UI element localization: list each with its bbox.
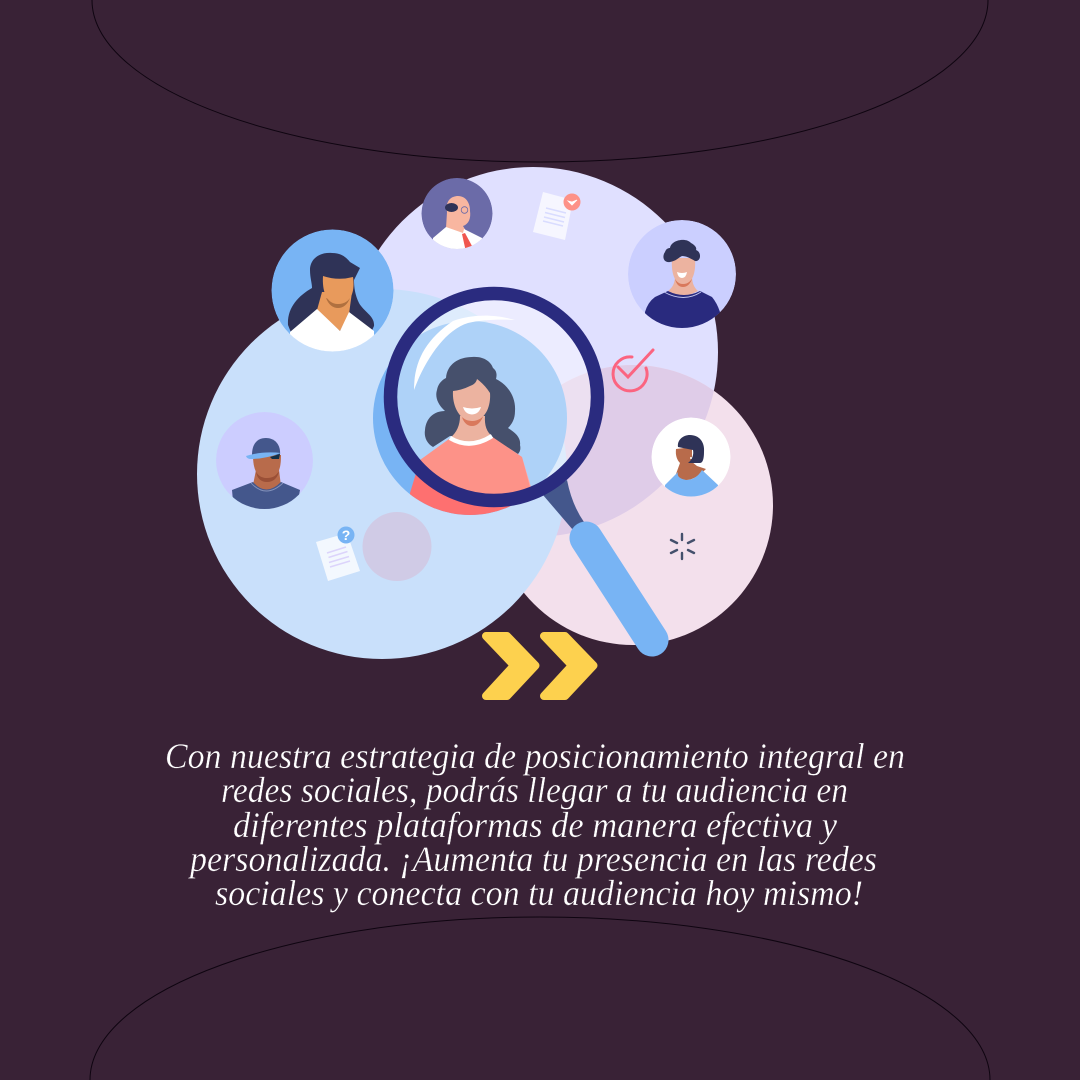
text block: main message: Con nuestra estrategia de posicionamiento integral en [165,736,905,776]
avatar: smiling man with curly hair [628,220,736,332]
hair [663,240,700,262]
magnifier glass [394,297,594,497]
glasses [461,207,468,213]
person in magnifier [414,316,530,494]
shirt [232,482,300,512]
avatar: woman with short dark hair [652,418,730,500]
shirt [433,227,482,249]
cap brim [246,452,281,459]
icon: document with check badge [533,192,580,240]
chin shadow [256,472,279,482]
collar [450,436,492,444]
hair [425,357,520,454]
smile [463,407,481,414]
neck [254,470,280,490]
text block: main message: personalizada. ¡Aumenta tu presencia en las redes [187,839,877,879]
top ellipse outline [92,0,988,162]
collar [664,292,701,298]
icon: yellow double chevron [486,636,594,696]
lens highlight [414,316,515,390]
chin shadow [326,298,350,308]
panel: lavender circle [348,167,718,537]
avatar: woman with long hair [272,230,394,356]
hair [288,253,374,335]
magnifier ring [390,294,598,500]
face [453,379,490,421]
panel: light blue circle [197,289,567,659]
collar [251,483,283,491]
chin shadow [462,416,484,426]
skin [676,447,706,480]
shirt [645,291,720,332]
cap shadow [270,454,280,459]
head [446,196,470,234]
panel: pink and lavender overlap [556,365,714,536]
tie [462,233,472,248]
icon: pink check circle [613,350,653,391]
panel: pink circle [493,365,773,645]
smile [677,272,687,278]
text block: main message: diferentes plataformas de manera efectiva y [233,805,837,845]
icon: document with question badge: ? [342,527,350,543]
neck [668,278,698,295]
text block: main message: redes sociales, podrás llegar a tu audiencia en [221,770,848,810]
body [420,437,530,494]
hair [445,203,458,212]
cap [252,438,280,455]
avatar: bald man with glasses [422,178,492,252]
icon: magnifying glass handle [543,480,652,640]
decorative muted circle [362,512,432,581]
chin shadow [675,279,692,287]
neck [450,416,492,444]
shirt [665,470,718,500]
person in magnifier: base circle [373,321,567,520]
shirt [290,309,374,356]
face [253,455,281,478]
text block: main message: sociales y conecta con tu audiencia hoy mismo! [215,873,863,913]
text block: main message [165,736,905,913]
neck [317,292,352,331]
earring [690,457,692,459]
face [323,276,354,304]
face [672,258,695,284]
icon: document with question badge [316,526,360,581]
avatar: man with cap [216,412,313,512]
icon: loading spark [671,534,694,559]
bottom ellipse outline [90,917,990,1080]
hair [678,435,704,463]
